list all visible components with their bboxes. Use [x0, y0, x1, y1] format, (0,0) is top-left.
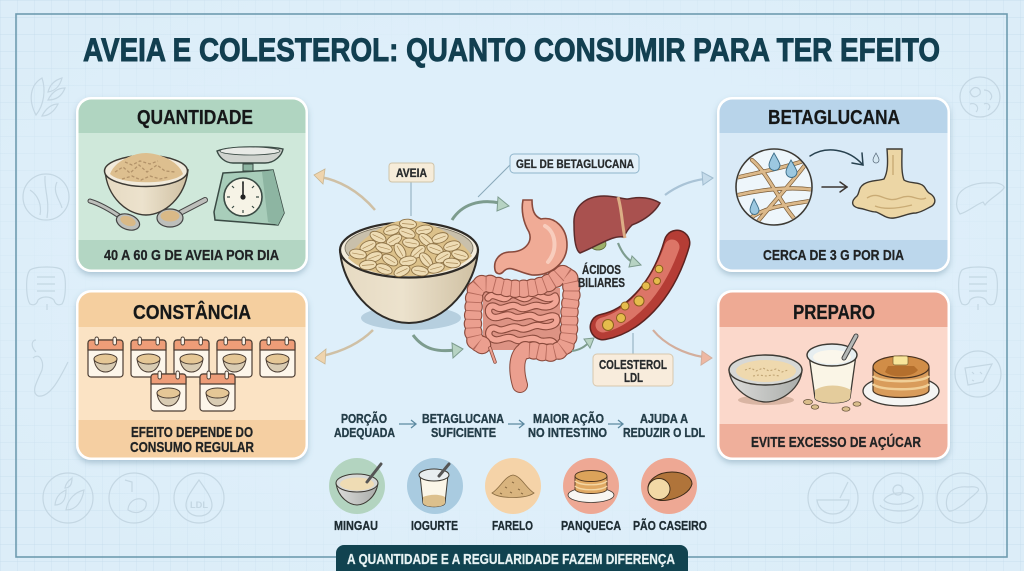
food item: farelo: FARELO [492, 518, 533, 533]
caption: betaglucana: CERCA DE 3 G POR DIA [763, 247, 904, 264]
caption: constancia [130, 424, 254, 456]
flow arrow 2 [508, 420, 524, 428]
arrow: liver to betaglucana [665, 172, 713, 195]
flow: step 3: NO INTESTINO [528, 426, 607, 440]
flow: step 1: PORÇÃO [341, 411, 387, 426]
illustration: artery with plaque [602, 243, 677, 330]
arrow: bowl to intestine [413, 335, 463, 358]
icon: fibre network with water [735, 149, 815, 225]
flow: step 4: AJUDA A [640, 412, 688, 426]
icon: spoon [90, 201, 142, 233]
arrow: intestine to artery [572, 338, 594, 351]
arrow: straight to gel [822, 182, 847, 192]
panel: constancia [76, 290, 308, 460]
food item: panqueca [561, 458, 621, 533]
food item: pao caseiro: PÃO CASEIRO [633, 518, 707, 533]
flow: step 1 [334, 411, 395, 440]
food item: pao caseiro [633, 458, 707, 533]
heading: constancia: CONSTÂNCIA [133, 300, 251, 324]
label: colesterol ldl: COLESTEROL [599, 358, 667, 372]
caption: constancia: EFEITO DEPENDE DO [131, 424, 253, 441]
panel: preparo [717, 290, 950, 460]
banner: A QUANTIDADE E A REGULARIDADE FAZEM DIFERENÇA [347, 552, 675, 568]
flow: step 4 [623, 412, 705, 440]
arrow: liver to artery [618, 243, 641, 267]
arrow: bowl to constancia [315, 330, 373, 364]
illustration: liver [574, 196, 660, 253]
flow: step 2 [422, 412, 504, 440]
heading: betaglucana: BETAGLUCANA [768, 107, 900, 129]
food item: iogurte [407, 458, 463, 533]
label: aveia [389, 163, 434, 216]
flow: step 2: BETAGLUCANA [422, 412, 504, 426]
food item: mingau: MINGAU [334, 518, 378, 533]
text: acidos biliares: BILIARES [578, 275, 625, 290]
decorative faint icons [23, 77, 1004, 523]
flow arrow 3 [608, 420, 623, 428]
label: gel de betaglucana [478, 154, 639, 197]
decorative faint icons: LDL [190, 500, 209, 510]
label: colesterol ldl [593, 333, 673, 386]
label: gel de betaglucana: GEL DE BETAGLUCANA [516, 157, 634, 171]
text: acidos biliares: ÁCIDOS [582, 262, 621, 277]
arrow: curved to gel [810, 150, 863, 165]
flow: step 2: SUFICIENTE [431, 426, 496, 440]
food item: mingau [329, 458, 385, 533]
arrow: bowl to quantidade [314, 169, 375, 210]
text: acidos biliares [578, 262, 625, 290]
flow: step 1: ADEQUADA [334, 426, 395, 440]
icon: viscous gel [853, 149, 935, 218]
caption: quantidade: 40 A 60 G DE AVEIA POR DIA [104, 247, 279, 264]
illustration: intestines [473, 274, 572, 385]
food item: iogurte: IOGURTE [411, 518, 458, 533]
flow: step 3 [528, 411, 607, 440]
arrow: bowl to stomach [452, 197, 509, 220]
illustration: large oat bowl [340, 218, 478, 330]
flow: step 4: REDUZIR O LDL [623, 426, 705, 440]
heading: preparo: PREPARO [793, 302, 875, 324]
icon: measuring scoop [157, 200, 205, 227]
flow: step 3: MAIOR AÇÃO [533, 411, 604, 426]
arrow: artery to preparo [653, 330, 712, 365]
illustration: stomach [495, 200, 567, 275]
label: aveia: AVEIA [396, 166, 427, 180]
icon: pancakes [863, 356, 939, 406]
icon: bowl of oats [104, 153, 188, 215]
icon: calendars with bowls [88, 337, 295, 411]
icon: bowl of porridge [729, 355, 802, 405]
panel: quantidade [76, 97, 308, 272]
panel: betaglucana [717, 97, 950, 272]
caption: constancia: CONSUMO REGULAR [130, 439, 254, 456]
food item: farelo [485, 458, 541, 533]
icon: kitchen scale [214, 147, 284, 225]
caption: preparo: EVITE EXCESSO DE AÇÚCAR [751, 433, 921, 451]
flow arrow 1 [399, 420, 416, 428]
heading: quantidade: QUANTIDADE [137, 107, 253, 129]
food item: panqueca: PANQUECA [561, 518, 621, 533]
label: colesterol ldl: LDL [624, 371, 643, 385]
banner [336, 545, 688, 571]
icon: yogurt cup [804, 336, 861, 411]
